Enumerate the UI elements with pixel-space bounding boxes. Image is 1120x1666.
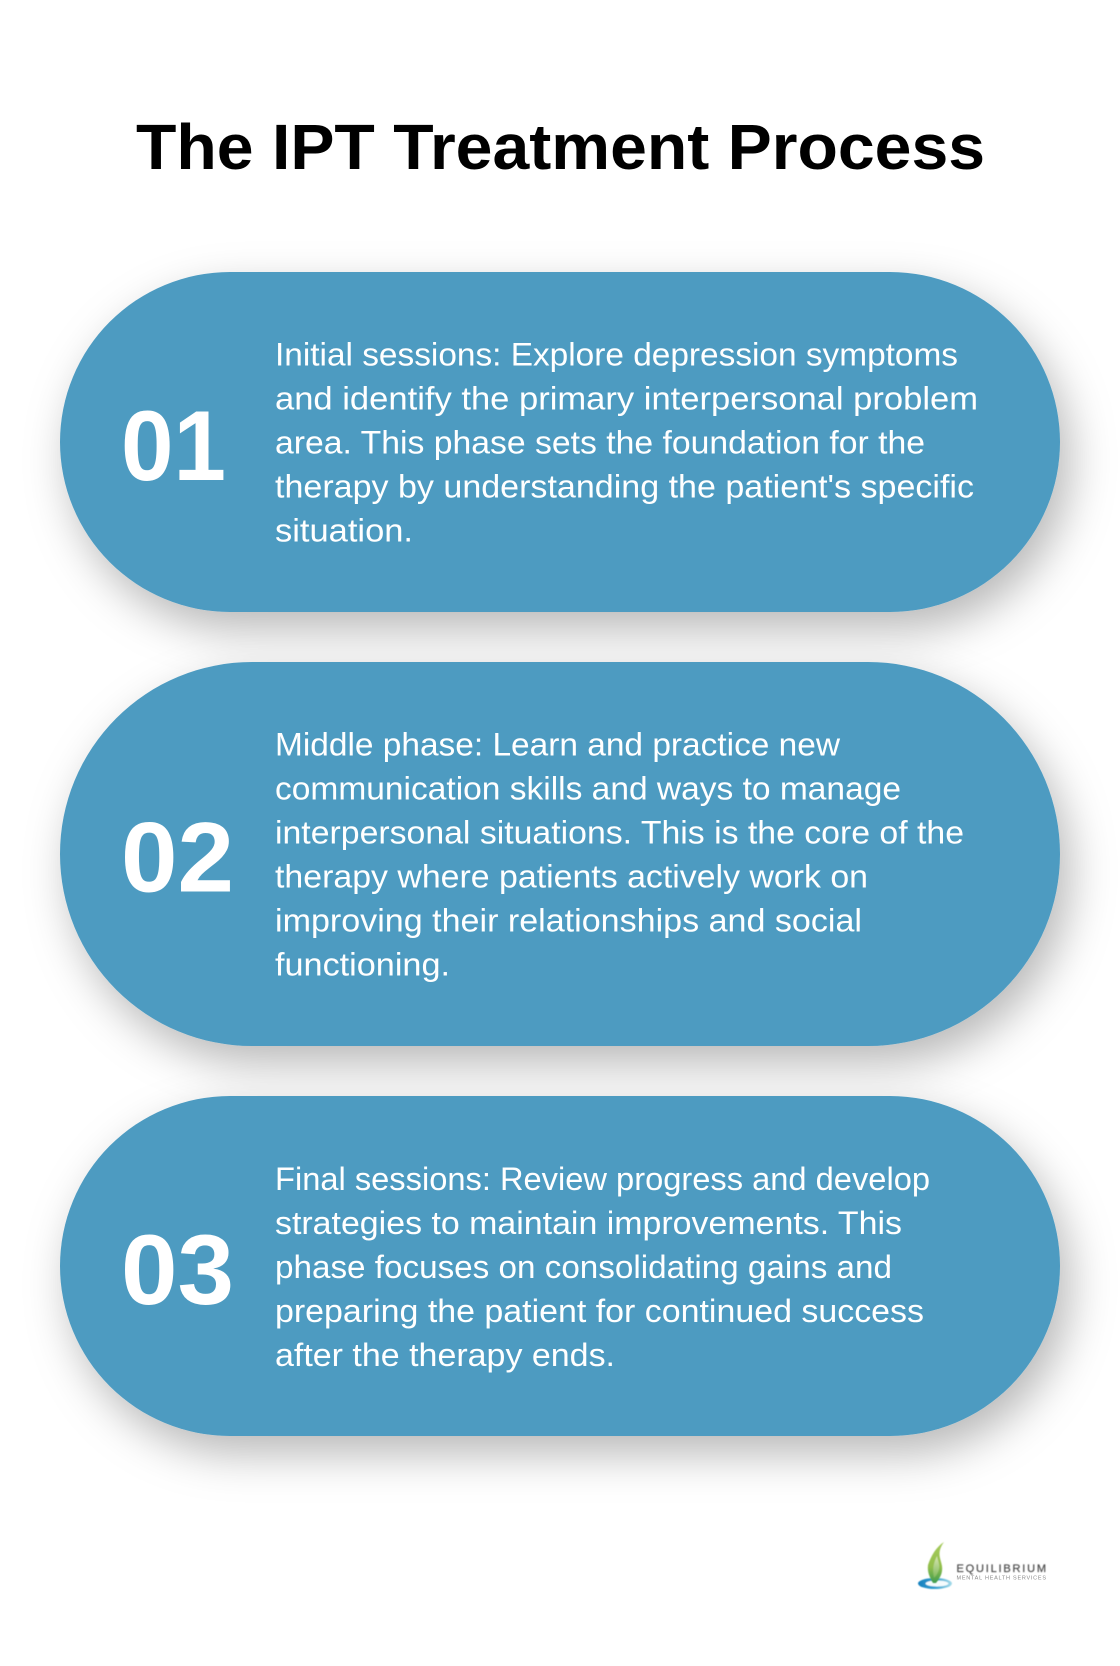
panel: step 02 bbox=[60, 662, 1060, 1046]
title: The IPT Treatment Process bbox=[136, 111, 985, 183]
text block 02: therapy where patients actively work on bbox=[275, 858, 868, 894]
text block 03: preparing the patient for continued success bbox=[275, 1293, 924, 1329]
icon: leaf bbox=[928, 1542, 944, 1583]
text block 02: Middle phase: Learn and practice new bbox=[275, 726, 841, 762]
number 02: 02 bbox=[121, 802, 234, 913]
text block 01: Initial sessions: Explore depression symptoms bbox=[275, 337, 958, 373]
number 03: 03 bbox=[121, 1214, 234, 1325]
text block 02: functioning. bbox=[275, 946, 450, 982]
text block 01: and identify the primary interpersonal problem bbox=[275, 381, 978, 417]
pill background 03 bbox=[60, 1096, 1060, 1436]
pill background 01 bbox=[60, 272, 1060, 612]
text block 01: situation. bbox=[275, 513, 413, 549]
text block 03 bbox=[275, 1161, 930, 1373]
logo name: EQUILIBRIUM bbox=[956, 1563, 1046, 1575]
text block 02: interpersonal situations. This is the core of the bbox=[275, 814, 964, 850]
text block 02: communication skills and ways to manage bbox=[275, 770, 901, 806]
text block 01: therapy by understanding the patient's specific bbox=[275, 469, 974, 505]
panel: step 01 bbox=[60, 272, 1060, 612]
panel: step 03 bbox=[60, 1096, 1060, 1436]
text block 03: strategies to maintain improvements. This bbox=[275, 1205, 902, 1241]
logo tagline: MENTAL HEALTH SERVICES bbox=[956, 1575, 1046, 1581]
text block 01: area. This phase sets the foundation for the bbox=[275, 425, 925, 461]
text block 02: improving their relationships and social bbox=[275, 902, 862, 938]
text block 01 bbox=[275, 337, 978, 549]
number 01: 01 bbox=[121, 390, 226, 501]
pill background 02 bbox=[60, 662, 1060, 1046]
text block 03: phase focuses on consolidating gains and bbox=[275, 1249, 892, 1285]
icon: water ring bbox=[918, 1578, 952, 1589]
text block 03: after the therapy ends. bbox=[275, 1337, 615, 1373]
text block 02 bbox=[275, 726, 964, 982]
logo: Equilibrium Mental Health Services bbox=[918, 1542, 1046, 1589]
text block 03: Final sessions: Review progress and develop bbox=[275, 1161, 930, 1197]
